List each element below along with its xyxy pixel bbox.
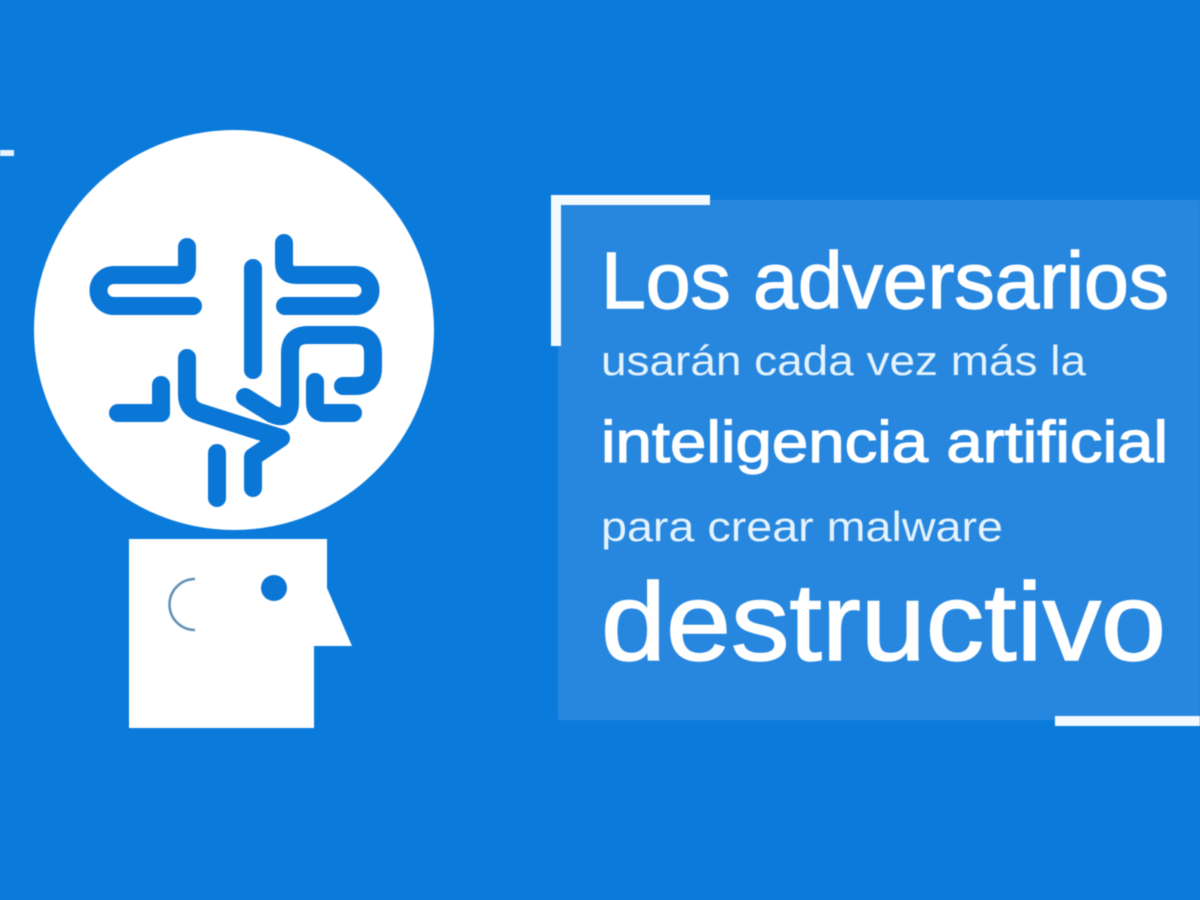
brain circle <box>34 130 434 530</box>
eye <box>261 575 287 601</box>
heading line 3: inteligencia artificial <box>601 410 1168 475</box>
bracket: top left <box>556 200 710 346</box>
panel: message <box>556 200 1200 726</box>
heading line 1: Los adversarios <box>601 236 1169 325</box>
bracket: bottom right <box>1055 716 1200 726</box>
ear <box>170 579 195 630</box>
text line 4: para crear malware <box>601 503 1003 550</box>
left edge tick <box>0 150 14 156</box>
heading line 5: destructivo <box>601 561 1166 684</box>
icon: head with circuit brain <box>34 130 434 728</box>
text line 2: usarán cada vez más la <box>601 337 1087 384</box>
head <box>129 539 352 728</box>
